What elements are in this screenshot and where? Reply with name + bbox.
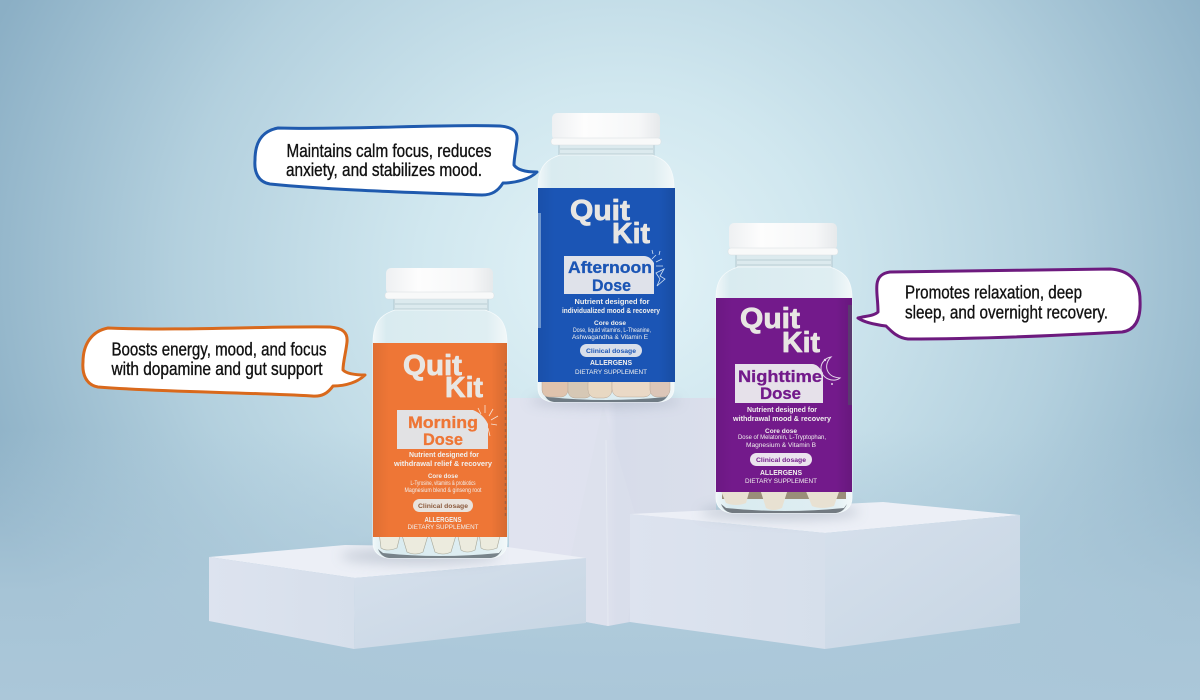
glass jar: [538, 143, 674, 402]
brand name: Quit: [740, 303, 800, 335]
dose panel: Dose: [592, 277, 631, 295]
label details: Clinical dosage: [418, 503, 468, 510]
dose panel: Dose: [423, 431, 463, 449]
block: tall centre: [509, 398, 716, 626]
callout: morning: [83, 327, 365, 396]
label details: Magnesium blend & ginseng root: [404, 487, 482, 494]
brand name: Quit: [403, 350, 462, 382]
capsules: [379, 532, 501, 554]
cap: [551, 113, 661, 145]
brand name: [740, 303, 820, 359]
glass jar: [373, 298, 507, 558]
icon: crescent moon: [821, 357, 840, 385]
label details: ALLERGENS: [424, 515, 462, 524]
label details: DIETARY SUPPLEMENT: [575, 369, 647, 376]
label details: Core dose: [765, 428, 797, 435]
brand name: [403, 350, 483, 404]
label details: Magnesium & Vitamin B: [746, 442, 816, 449]
label: [538, 188, 675, 382]
callout: nighttime: [858, 269, 1140, 339]
label details: Nutrient designed for: [574, 297, 650, 306]
label: [716, 298, 852, 492]
callout: morning: with dopamine and gut support: [111, 359, 322, 379]
cap: [385, 268, 494, 299]
capsules: [720, 489, 846, 510]
label details: Nutrient designed for: [747, 405, 817, 414]
dose panel: Nighttime: [738, 368, 822, 386]
floor tint: [0, 430, 1200, 700]
brand name: Kit: [612, 218, 650, 250]
capsules: [542, 375, 670, 398]
label details: withdrawal mood & recovery: [732, 414, 832, 423]
label details: Core dose: [428, 473, 458, 480]
label details: withdrawal relief & recovery: [393, 459, 493, 468]
label details: L-Tyrosine, vitamins & probiotics: [410, 480, 476, 487]
label details: DIETARY SUPPLEMENT: [408, 524, 479, 531]
nutrition strip: [848, 305, 852, 405]
callout: morning: Boosts energy, mood, and focus: [112, 340, 326, 360]
label details: Nutrient designed for: [409, 450, 479, 459]
icon: sunrise rays: [478, 405, 498, 436]
callout: nighttime: Promotes relaxation, deep: [905, 282, 1082, 302]
label details: Core dose: [594, 320, 626, 327]
label details: Clinical dosage: [756, 457, 806, 464]
label details: Dose of Melatonin, L-Tryptophan,: [738, 434, 826, 441]
label details: [732, 405, 832, 485]
bottle: afternoon dose: [538, 113, 675, 402]
bottle: nighttime dose: [716, 223, 852, 513]
dose panel: [735, 364, 823, 403]
dose panel: Morning: [408, 414, 478, 432]
label details: Clinical dosage: [586, 348, 636, 355]
label details: Ashwagandha & Vitamin E: [572, 334, 649, 341]
label details: ALLERGENS: [590, 358, 632, 367]
block: left low: [209, 545, 586, 649]
bottle: morning dose: [373, 268, 507, 558]
cap: [728, 223, 838, 255]
callout: afternoon: [255, 126, 537, 195]
bottle shadows: [340, 395, 860, 564]
label: [373, 343, 507, 537]
brand name: [570, 195, 650, 250]
label details: Dose, liquid vitamins, L-Theanine,: [573, 327, 651, 334]
brand name: Quit: [570, 195, 630, 227]
dose panel: [564, 256, 654, 295]
callout: afternoon: anxiety, and stabilizes mood.: [286, 160, 482, 180]
icon: afternoon sparkle: [652, 250, 665, 286]
glass jar: [716, 253, 852, 513]
brand name: Kit: [782, 327, 820, 359]
callout: afternoon: Maintains calm focus, reduces: [286, 141, 492, 161]
block: right low: [630, 502, 1020, 649]
label details: ALLERGENS: [760, 468, 802, 477]
dose panel: Dose: [760, 385, 801, 403]
label details: [393, 450, 493, 531]
label details: [562, 297, 661, 376]
brand name: Kit: [445, 372, 483, 404]
dose panel: [397, 410, 488, 449]
label details: individualized mood & recovery: [562, 306, 661, 315]
callout: nighttime: sleep, and overnight recovery.: [905, 302, 1108, 322]
label details: DIETARY SUPPLEMENT: [745, 478, 817, 485]
podium: [209, 398, 1020, 649]
dose panel: Afternoon: [568, 259, 652, 277]
